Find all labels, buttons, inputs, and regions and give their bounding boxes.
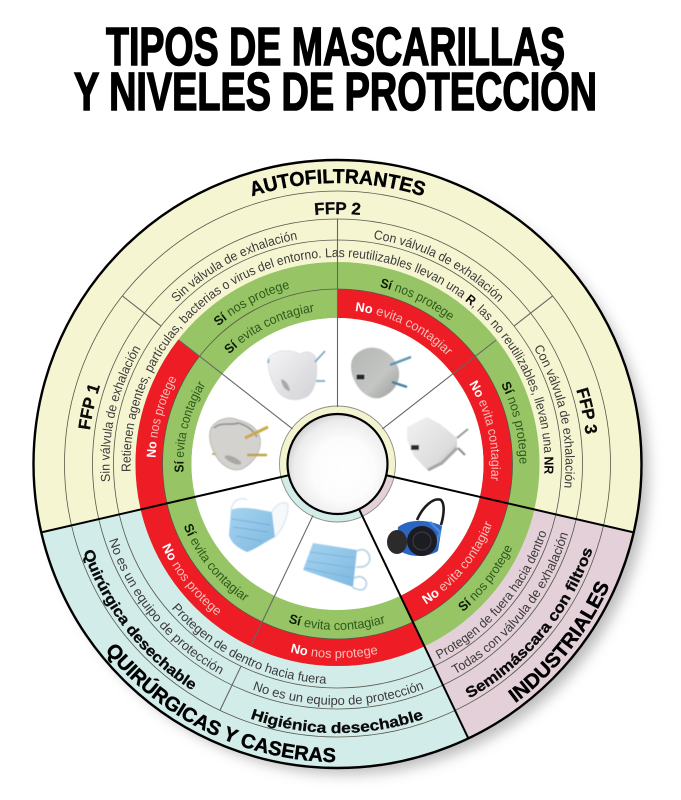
text: quirurgica no es equipo: No es un equipo de protección [109,538,223,674]
label: higienica, contagio: Sí evita contagiar [289,614,384,630]
heading: AUTOFILTRANTES: AUTOFILTRANTES [252,169,426,196]
center hub [288,414,388,514]
text: higienica no es equipo: No es un equipo de protección [253,681,424,708]
sector dividers [41,219,634,738]
panel: quirurgicas y caseras sector [41,464,468,768]
hub ring [280,406,396,522]
heading: semimascara con filtros: Semimáscara con filtros [466,548,592,698]
icon: folded FFP 3 mask [407,417,468,470]
label: sector FFP 2 con valvula, contagio: No evita contagiar [356,302,452,354]
text: FFP 2 con valvula: Con válvula de exhalación [374,230,502,302]
text: retienen agentes long arc: Retienen agentes, partículas, bacterias o virus del entorno. Las reutilizables llevan una R, las no reutilizables, llevan una NR [121,248,554,474]
label: sector FFP 3, contagio: No evita contagiar [470,380,501,481]
text: FFP 1 sin valvula: Sin válvula de exhalación [100,346,140,482]
label: sector FFP 1, contagio: Sí evita contagiar [174,381,204,472]
icon: half-mask respirator with filters [387,499,444,556]
title [74,17,597,122]
white mask area [192,318,484,610]
text: protegen de fuera hacia dentro: Protegen de fuera hacia dentro [436,531,546,659]
icon: blue surgical mask [229,499,288,552]
heading: INDUSTRIALES: INDUSTRIALES [508,582,608,703]
panel: industriales sector [338,464,634,738]
text: protegen de dentro hacia fuera: Protegen de dentro hacia fuera [172,603,326,684]
wheel shadow [46,172,648,774]
label: sector FFP 3, protege: Sí nos protege [502,382,526,464]
label: semimascara, contagio: No evita contagiar [422,520,492,604]
concentric ring lines [64,191,610,737]
label: quirurgica, protege: No nos protege [162,543,220,615]
text: todas con valvula: Todas con válvula de exhalación [451,532,568,673]
panel: autofiltrantes sector [34,160,642,768]
heading: FFP 1: FFP 1 [78,385,100,430]
heading: higienica desechable: Higiénica desechable [251,708,423,734]
label: sector FFP 1, protege: No nos protege [146,376,176,458]
icon: blue hygienic mask [303,543,370,590]
icon: white FFP 2 mask [268,351,325,400]
icon: valved FFP 2 mask [351,348,411,398]
label: quirurgica, contagio: Sí evita contagiar [184,524,248,600]
heading: QUIRURGICAS Y CASERAS: QUIRÚRGICAS Y CASERAS [108,644,336,762]
label: sector FFP 2 sin valvula, protege: Sí nos protege [214,282,289,325]
label: higienica, protege: No nos protege [291,644,378,661]
contagion ring: inner band [162,289,512,639]
label: sector FFP 2 sin valvula, contagio: Sí evita contagiar [224,304,314,353]
protection ring: outer band [149,276,526,652]
outer rim [34,160,642,768]
heading: FFP 3: FFP 3 [576,387,598,434]
text: FFP 2 sin valvula: Sin válvula de exhalación [172,232,297,302]
text: FFP 3 con valvula: Con válvula de exhalación [535,345,575,488]
icon: FFP 1 mask with yellow straps [210,418,268,470]
heading: FFP 2: FFP 2 [314,202,360,216]
label: sector FFP 2 con valvula, protege: Sí nos protege [380,278,453,320]
heading: quirurgica desechable: Quirúrgica desechable [83,550,195,690]
label: semimascara, protege: Sí nos protege [458,546,512,611]
protection wheel [32,158,643,770]
